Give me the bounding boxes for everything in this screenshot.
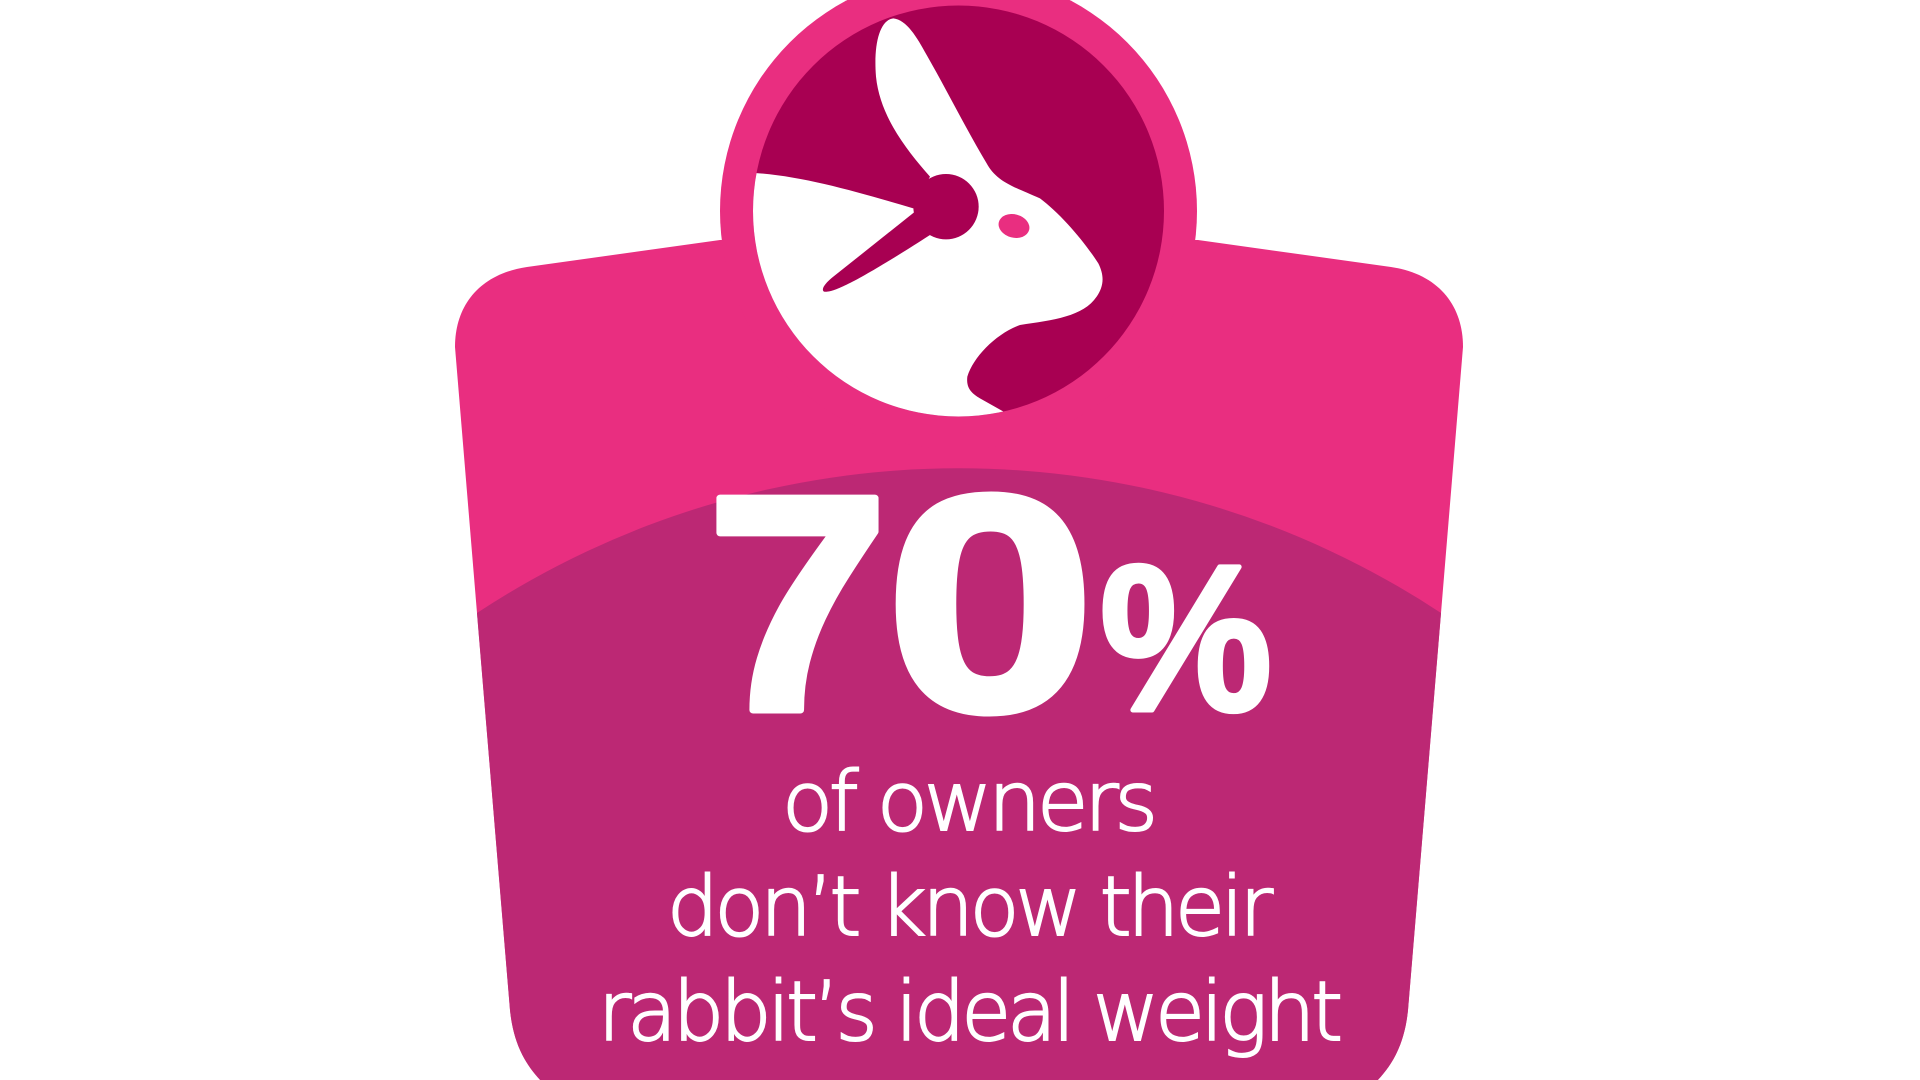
scale dial housing: [720, 0, 1197, 450]
big number: 70%: 7: [706, 431, 889, 776]
big number: 70%: [706, 431, 1272, 776]
rabbit eye: [998, 214, 1030, 238]
scale body: [455, 240, 1463, 1080]
rabbit silhouette: [753, 18, 1103, 416]
icon: rabbit clock dial: [733, 6, 1164, 440]
caption text: rabbit’s ideal weight: [598, 965, 1340, 1060]
big number: 70%: %: [1100, 522, 1272, 755]
scale lower panel: [477, 468, 1441, 1080]
caption text: of owners: [782, 755, 1154, 850]
caption text: [598, 755, 1340, 1060]
big number: 70%: 0: [885, 432, 1096, 776]
clock hands: [823, 174, 979, 292]
caption text: don’t know their: [667, 860, 1273, 955]
panel: weighing scale badge: [455, 0, 1463, 1080]
